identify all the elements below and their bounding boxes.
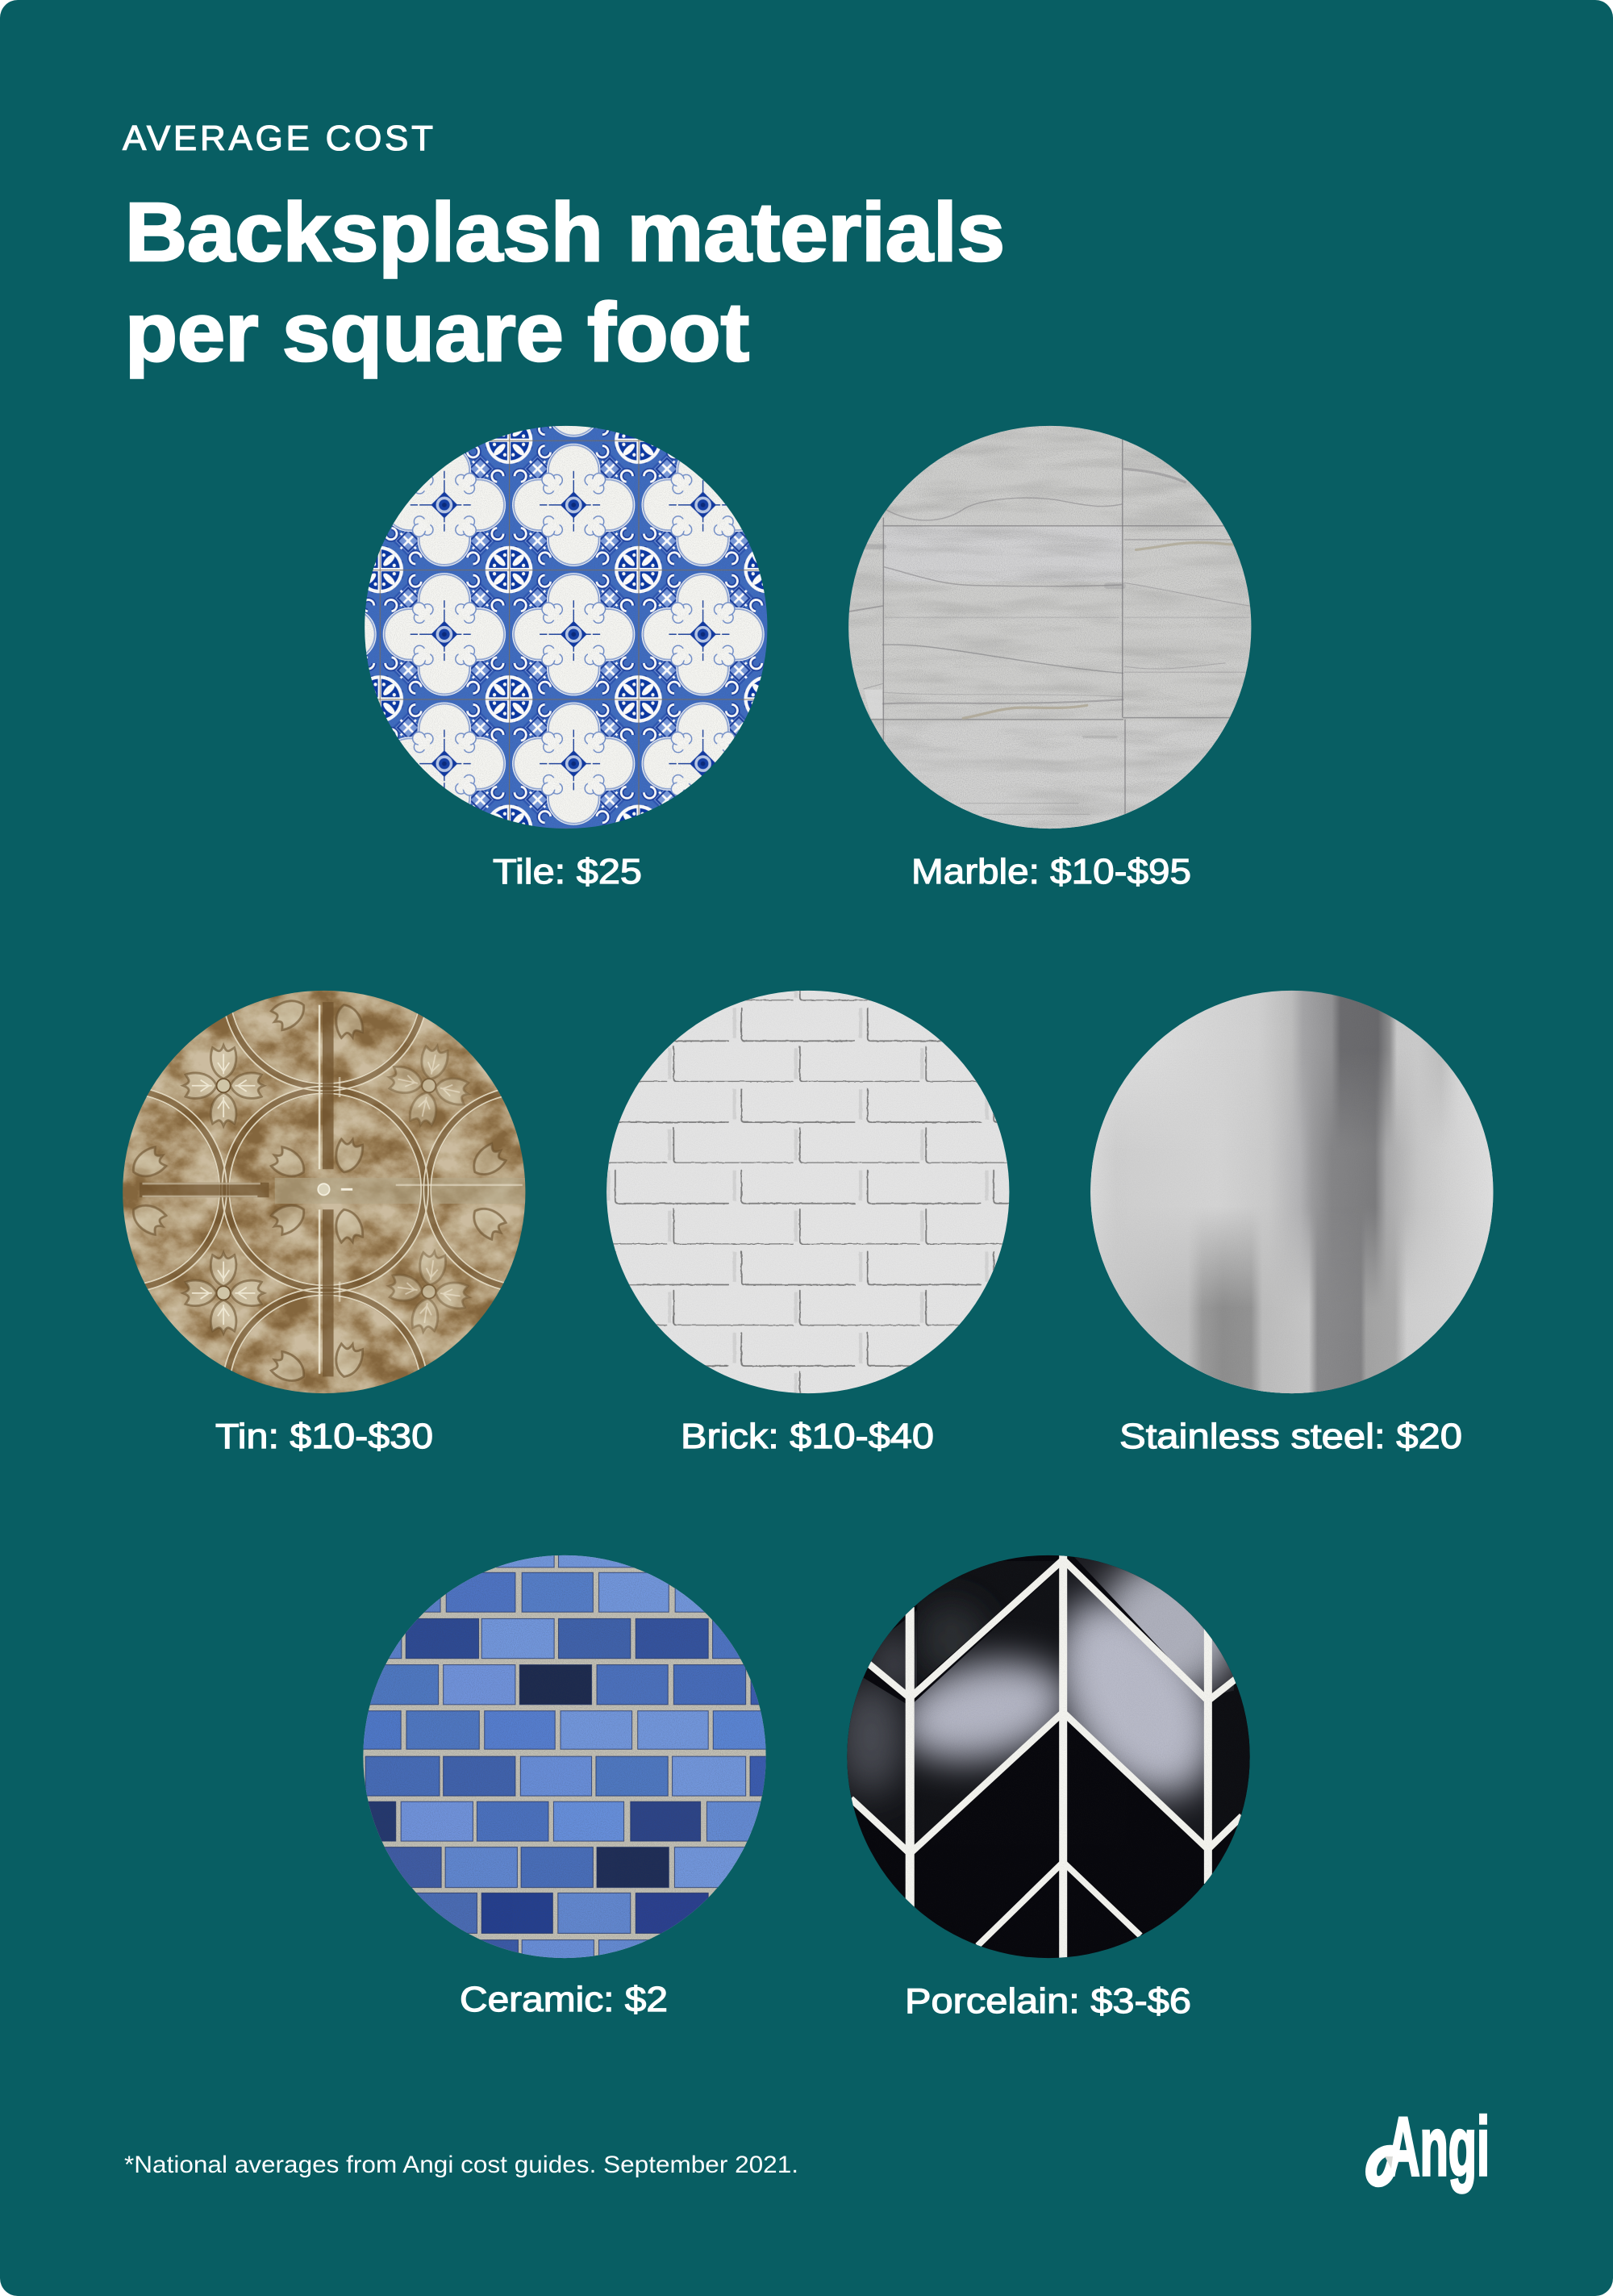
footnote: *National averages from Angi cost guides. September 2021. (124, 2152, 798, 2178)
material: brick swatch (606, 991, 1010, 1394)
material: tin swatch (123, 991, 526, 1394)
label: porcelain price: Porcelain: $3-$6 (905, 1981, 1191, 2021)
label: tile price: Tile: $25 (493, 852, 642, 891)
logo: Angi (1371, 2100, 1490, 2193)
label: marble price: Marble: $10-$95 (911, 852, 1191, 891)
label: stainless steel price: Stainless steel: $20 (1119, 1417, 1462, 1456)
title: Backsplash materials (125, 186, 1005, 278)
kicker: average cost: AVERAGE COST (123, 119, 433, 158)
material: tile swatch (365, 426, 768, 829)
title (125, 186, 1005, 378)
material: marble swatch (848, 426, 1252, 829)
title: per square foot (125, 286, 749, 378)
material: porcelain swatch (847, 1555, 1250, 1959)
material: ceramic swatch (363, 1555, 766, 1959)
label: brick price: Brick: $10-$40 (681, 1417, 934, 1456)
logo: Angi: Angi (1386, 2100, 1490, 2193)
material: stainless steel swatch (1090, 991, 1494, 1394)
label: tin price: Tin: $10-$30 (215, 1417, 433, 1456)
label: ceramic price: Ceramic: $2 (460, 1980, 668, 2019)
